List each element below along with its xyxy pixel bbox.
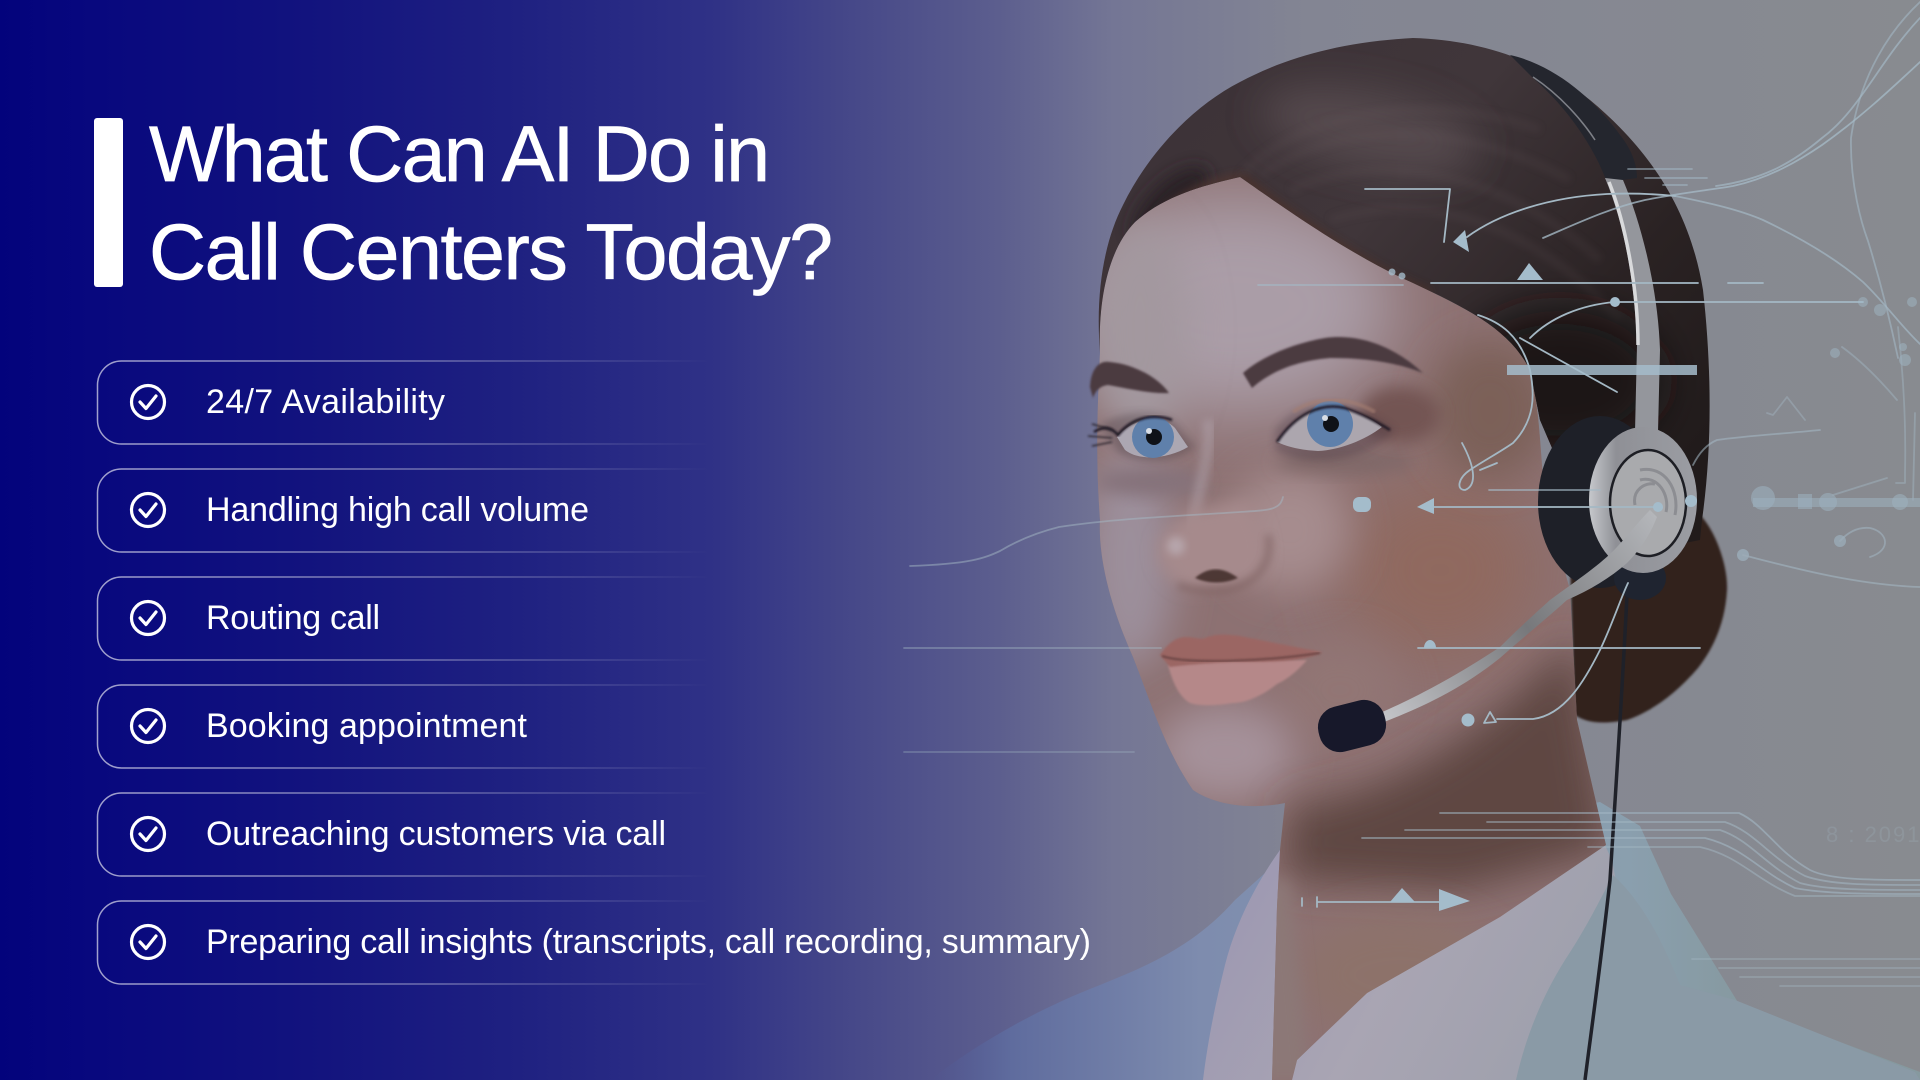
eyebrows	[1090, 337, 1423, 398]
microphone boom	[1380, 510, 1657, 722]
neck arrow	[1302, 888, 1470, 911]
hair bun	[1570, 515, 1727, 722]
hair	[1090, 30, 1720, 570]
eye right	[1275, 400, 1395, 460]
tech line overlay	[904, 2, 1920, 986]
nose	[1158, 420, 1269, 591]
title	[149, 109, 833, 296]
rocket and curve	[1462, 583, 1628, 726]
ear pad	[1538, 416, 1662, 588]
headband	[1510, 55, 1637, 182]
eye left	[1088, 413, 1195, 461]
row: Outreaching customers via call: Outreaching customers via call	[206, 815, 666, 853]
lips	[1160, 635, 1322, 705]
row: Handling high call volume	[98, 469, 738, 552]
skin: face and neck	[1075, 160, 1620, 1080]
row: Outreaching customers via call	[98, 793, 738, 876]
row: 24/7 Availability	[98, 361, 738, 444]
temple marker line	[1258, 263, 1763, 285]
microphone foam	[1313, 695, 1391, 757]
row: Preparing call insights: Preparing call insights (transcripts, call recording, summary)	[206, 923, 1091, 961]
title accent bar	[94, 118, 123, 287]
feature list	[98, 361, 1091, 984]
lower right lines	[1692, 959, 1920, 986]
forehead bracket and arrow	[1365, 2, 1920, 358]
row: 24/7 Availability: 24/7 Availability	[206, 383, 445, 421]
ear scribble lines	[1459, 297, 1863, 490]
waveform lines	[1362, 813, 1920, 896]
ear cup	[1589, 427, 1697, 573]
row: Routing call: Routing call	[206, 599, 380, 637]
headband slider	[1605, 178, 1660, 432]
circuit at right	[1693, 297, 1920, 587]
row: Booking appointment	[98, 685, 738, 768]
title: Call Centers Today?	[149, 207, 833, 296]
photo: call center agent with headset	[930, 30, 1920, 1080]
cheek arrow	[910, 490, 1697, 566]
row: Routing call	[98, 577, 738, 660]
row: Preparing call insights	[98, 901, 1091, 984]
shirt	[1203, 835, 1660, 1080]
row: Handling high call volume: Handling high call volume	[206, 491, 589, 529]
lip level lines	[904, 640, 1700, 752]
ear cup shadow	[1614, 556, 1666, 600]
row: Booking appointment: Booking appointment	[206, 707, 528, 745]
wire	[1585, 575, 1628, 1080]
jacket	[930, 802, 1920, 1080]
lapel	[1516, 875, 1920, 1080]
title: What Can AI Do in	[149, 109, 770, 198]
